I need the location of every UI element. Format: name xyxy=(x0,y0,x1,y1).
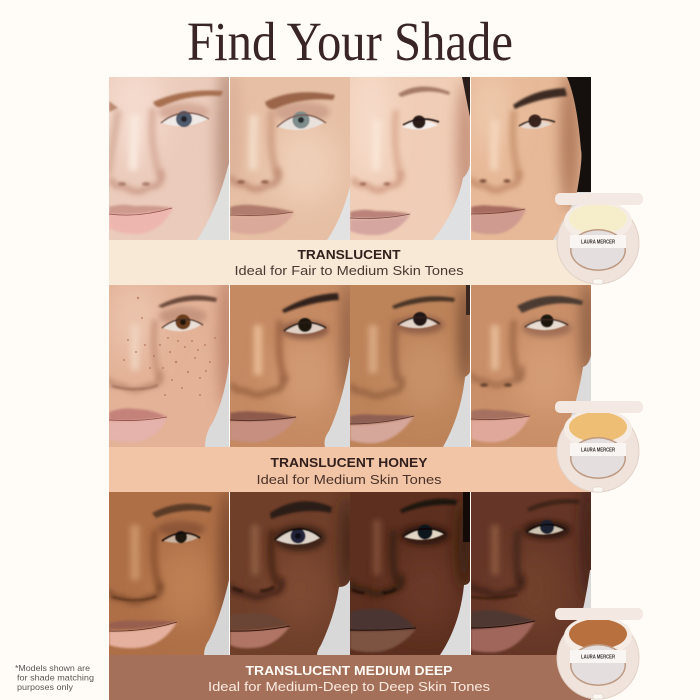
text: translucent description: Ideal for Fair to Medium Skin Tones xyxy=(234,263,464,278)
icon: translucent compact: LAURA MERCER xyxy=(581,240,615,246)
heading: translucent: TRANSLUCENT xyxy=(298,247,401,262)
photo: model 12 xyxy=(471,480,594,655)
photo: model 1 xyxy=(109,77,229,240)
icon: translucent honey compact xyxy=(555,401,643,492)
icon: translucent medium deep compact: LAURA MERCER xyxy=(581,654,615,660)
photo: model 6 xyxy=(230,280,354,447)
heading: translucent medium deep: TRANSLUCENT MEDIUM DEEP xyxy=(246,663,453,678)
photo: model 10 xyxy=(230,492,353,655)
footnote: for shade matching xyxy=(17,672,94,682)
footnote: purposes only xyxy=(17,682,74,692)
photo: model 5 xyxy=(109,285,229,447)
heading: translucent honey: TRANSLUCENT HONEY xyxy=(270,455,428,470)
photo: model 9 xyxy=(109,490,236,655)
band: translucent honey xyxy=(109,447,591,492)
panel: translucent medium deep model photos xyxy=(109,480,594,655)
band: translucent xyxy=(109,240,591,285)
photo: model 7 xyxy=(350,285,472,447)
icon: translucent medium deep compact xyxy=(555,608,643,699)
text: translucent honey description: Ideal for Medium Skin Tones xyxy=(256,472,442,487)
icon: translucent honey compact: LAURA MERCER xyxy=(581,448,615,454)
photo: model 8 xyxy=(471,280,595,447)
footnote xyxy=(15,663,94,692)
photo: model 4 xyxy=(471,70,591,240)
panel: translucent model photos xyxy=(109,77,591,240)
icon: translucent compact xyxy=(555,193,643,284)
text: translucent medium deep description: Ideal for Medium-Deep to Deep Skin Tones xyxy=(208,679,491,694)
band: translucent medium deep xyxy=(109,655,591,700)
footnote: *Models shown are xyxy=(15,663,90,673)
photo: model 3 xyxy=(350,77,470,240)
title: Find Your Shade xyxy=(187,11,513,72)
photo: model 11 xyxy=(350,492,470,655)
photo: model 2 xyxy=(225,70,350,240)
panel: translucent honey model photos xyxy=(109,270,595,447)
